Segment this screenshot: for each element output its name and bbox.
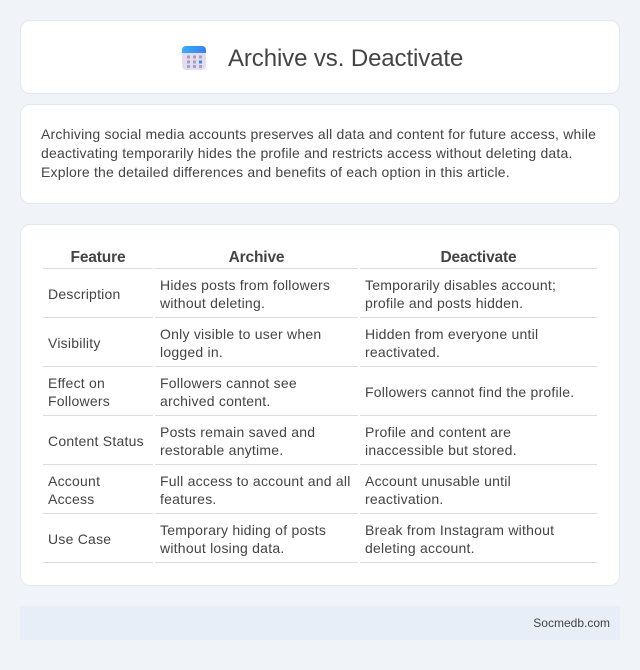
text: Followers cannot see (160, 375, 297, 391)
table panel (20, 224, 620, 586)
title: Archive vs. Deactivate (228, 45, 463, 72)
row: Content Status: Content Status (48, 433, 144, 449)
text: without losing data. (160, 540, 284, 556)
text: profile and posts hidden. (365, 295, 523, 311)
intro text: deactivating temporarily hides the profile and restricts access without deleting data. (41, 145, 573, 161)
text: Profile and content are (365, 424, 511, 440)
row: Effect on Followers: Effect on (48, 375, 105, 391)
text: reactivated. (365, 344, 440, 360)
intro text: Archiving social media accounts preserves all data and content for future access, while (41, 126, 596, 142)
column heading: Deactivate: Deactivate (440, 249, 517, 266)
text: Hidden from everyone until (365, 326, 538, 342)
text: Temporary hiding of posts (160, 522, 326, 538)
row: Use Case: Use Case (48, 531, 111, 547)
column heading: Feature: Feature (71, 249, 125, 266)
text: Hides posts from followers (160, 277, 330, 293)
text: Temporarily disables account; (365, 277, 556, 293)
footer bar (20, 606, 620, 640)
row: Description: Description (48, 286, 121, 302)
intro text: Explore the detailed differences and benefits of each option in this article. (41, 164, 510, 180)
text: Break from Instagram without (365, 522, 554, 538)
text: restorable anytime. (160, 442, 283, 458)
text: reactivation. (365, 491, 443, 507)
text: inaccessible but stored. (365, 442, 517, 458)
text: Only visible to user when (160, 326, 321, 342)
row: Effect on Followers (48, 375, 110, 409)
header panel (20, 20, 620, 94)
row: Account Access (48, 473, 100, 507)
intro panel (20, 104, 620, 204)
text: Account unusable until (365, 473, 511, 489)
row: Account Access: Access (48, 491, 95, 507)
text: archived content. (160, 393, 271, 409)
text: Posts remain saved and (160, 424, 315, 440)
text: without deleting. (160, 295, 265, 311)
text: logged in. (160, 344, 223, 360)
row: Effect on Followers: Followers (48, 393, 110, 409)
intro text (41, 126, 596, 180)
icon: calendar (182, 46, 206, 70)
text: Full access to account and all (160, 473, 351, 489)
row: Visibility: Visibility (48, 335, 101, 351)
table (43, 247, 597, 564)
text: features. (160, 491, 217, 507)
text: Followers cannot find the profile. (365, 384, 574, 400)
text: deleting account. (365, 540, 475, 556)
footer text: Socmedb.com (533, 616, 610, 630)
column heading: Archive: Archive (229, 249, 284, 266)
row: Account Access: Account (48, 473, 100, 489)
